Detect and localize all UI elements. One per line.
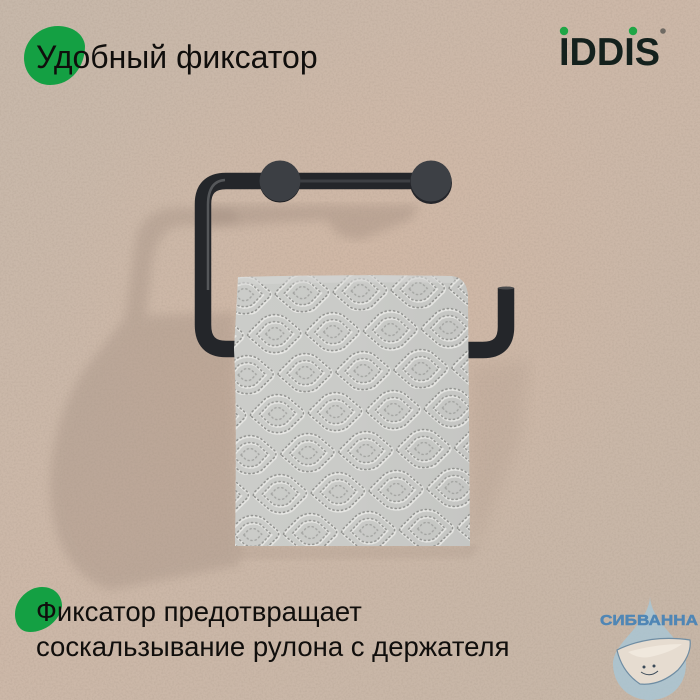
- description text: [36, 596, 509, 662]
- holder: wall mount discs: [260, 160, 452, 204]
- paper roll: [234, 275, 470, 546]
- description text: соскальзывание рулона с держателя: [36, 630, 509, 662]
- holder: bent metal rod: [203, 180, 514, 350]
- description text: Фиксатор предотвращает: [36, 596, 362, 627]
- roll and holder shadow on the wall: [50, 205, 530, 590]
- title: Удобный фиксатор: [36, 39, 318, 75]
- watermark: СИБВАННА drop logo: СИБВАННА: [600, 612, 698, 629]
